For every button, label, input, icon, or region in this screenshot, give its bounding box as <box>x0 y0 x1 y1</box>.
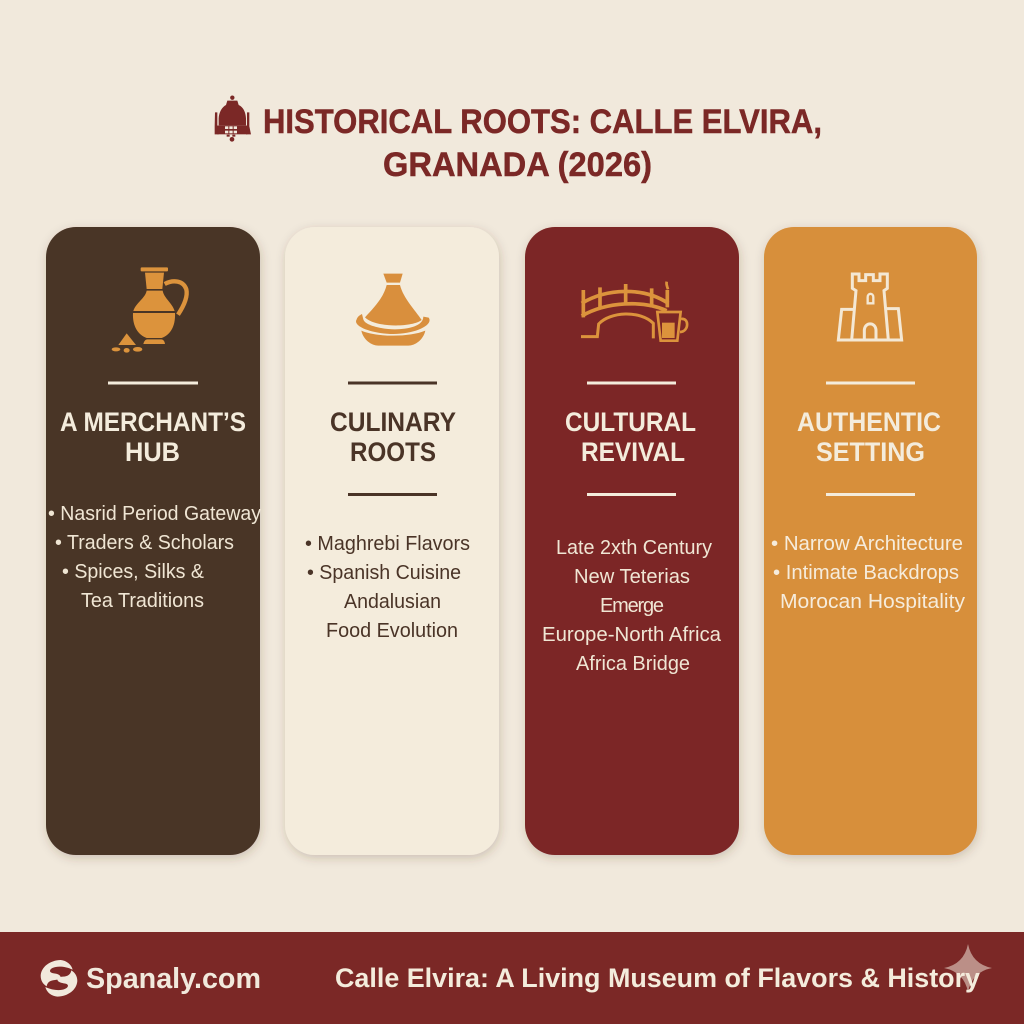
heading: ROOTS <box>350 437 436 467</box>
heading: CULTURAL <box>565 407 696 437</box>
icon: castle tower <box>838 274 902 340</box>
title line 2: GRANADA (2026) <box>383 146 652 184</box>
text block: Europe-North Africa <box>542 624 722 646</box>
tagline: Calle Elvira: A Living Museum of Flavors & History <box>335 963 980 993</box>
panel: a merchant's hub <box>46 227 261 855</box>
text block <box>48 503 261 612</box>
text block: • Intimate Backdrops <box>773 562 959 584</box>
divider <box>348 493 437 496</box>
text block: Tea Traditions <box>81 590 204 612</box>
divider <box>108 382 198 384</box>
heading: HUB <box>125 437 180 467</box>
icon: jug and spices <box>112 267 187 353</box>
title <box>215 95 822 184</box>
text block: New Teterias <box>574 566 690 588</box>
icon: tagine <box>356 274 430 346</box>
text block: Food Evolution <box>326 620 458 642</box>
divider <box>348 382 437 384</box>
text block: Morocan Hospitality <box>780 591 965 613</box>
panel: culinary roots <box>285 227 499 855</box>
heading <box>797 407 941 467</box>
text block: Africa Bridge <box>576 653 690 675</box>
text block <box>542 537 722 675</box>
text block: Late 2xth Century <box>556 537 712 559</box>
heading <box>565 407 696 467</box>
divider <box>587 493 676 496</box>
icon: bridge and tea glass <box>581 282 687 341</box>
footer band <box>0 932 1024 1024</box>
icon: spanaly logo <box>41 960 77 997</box>
heading: A MERCHANT’S <box>60 407 246 437</box>
text block: • Nasrid Period Gateway <box>48 503 261 525</box>
sparkle <box>944 944 992 992</box>
heading: SETTING <box>816 437 925 467</box>
text block: Andalusian <box>344 591 441 613</box>
text block: Emerge <box>600 595 664 617</box>
divider <box>587 382 676 384</box>
brand name: Spanaly.com <box>86 963 261 995</box>
text block: • Narrow Architecture <box>771 533 963 555</box>
heading <box>60 407 246 467</box>
heading <box>330 407 456 467</box>
panel: authentic setting <box>764 227 977 855</box>
text block <box>305 533 470 642</box>
divider <box>826 382 915 384</box>
heading: CULINARY <box>330 407 456 437</box>
text block: • Traders & Scholars <box>55 532 234 554</box>
text block: • Spanish Cuisine <box>307 562 461 584</box>
text block <box>771 533 965 613</box>
text block: • Maghrebi Flavors <box>305 533 470 555</box>
heading: AUTHENTIC <box>797 407 941 437</box>
panel: cultural revival <box>525 227 739 855</box>
divider <box>826 493 915 496</box>
text block: • Spices, Silks & <box>62 561 205 583</box>
icon: domed building <box>215 95 251 142</box>
heading: REVIVAL <box>581 437 685 467</box>
title line 1: HISTORICAL ROOTS: CALLE ELVIRA, <box>263 103 822 141</box>
